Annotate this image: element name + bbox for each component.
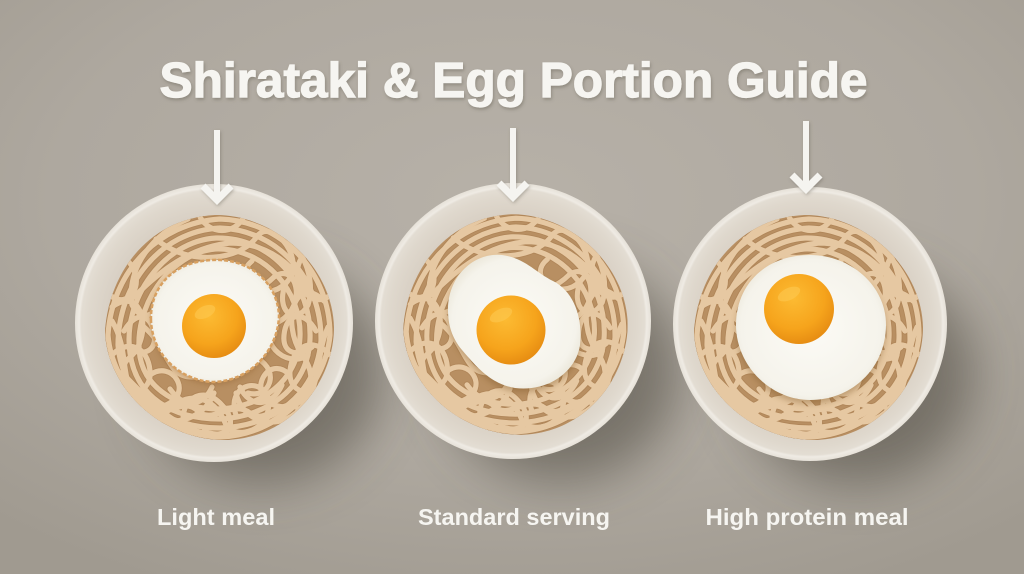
bowl: high protein	[673, 187, 947, 461]
noodles: standard serving	[402, 210, 630, 438]
arrow: high protein	[792, 121, 820, 189]
bowl: standard serving	[375, 183, 651, 459]
label: standard serving: Standard serving	[418, 504, 610, 530]
arrow: standard serving	[499, 128, 527, 197]
title: Shirataki & Egg Portion Guide	[160, 54, 868, 108]
panel: light meal bowl	[75, 184, 382, 484]
arrow: light meal	[203, 130, 231, 200]
egg: high protein	[736, 255, 886, 404]
label: light meal: Light meal	[157, 504, 275, 530]
bowl: light meal	[75, 184, 353, 462]
noodles: light meal	[104, 211, 336, 443]
panel: standard serving bowl	[375, 183, 680, 482]
noodles: high protein	[693, 211, 925, 443]
panel: high protein bowl	[673, 187, 974, 484]
egg: light meal	[151, 260, 279, 385]
egg: standard serving	[448, 255, 581, 393]
label: high protein meal: High protein meal	[706, 504, 908, 530]
